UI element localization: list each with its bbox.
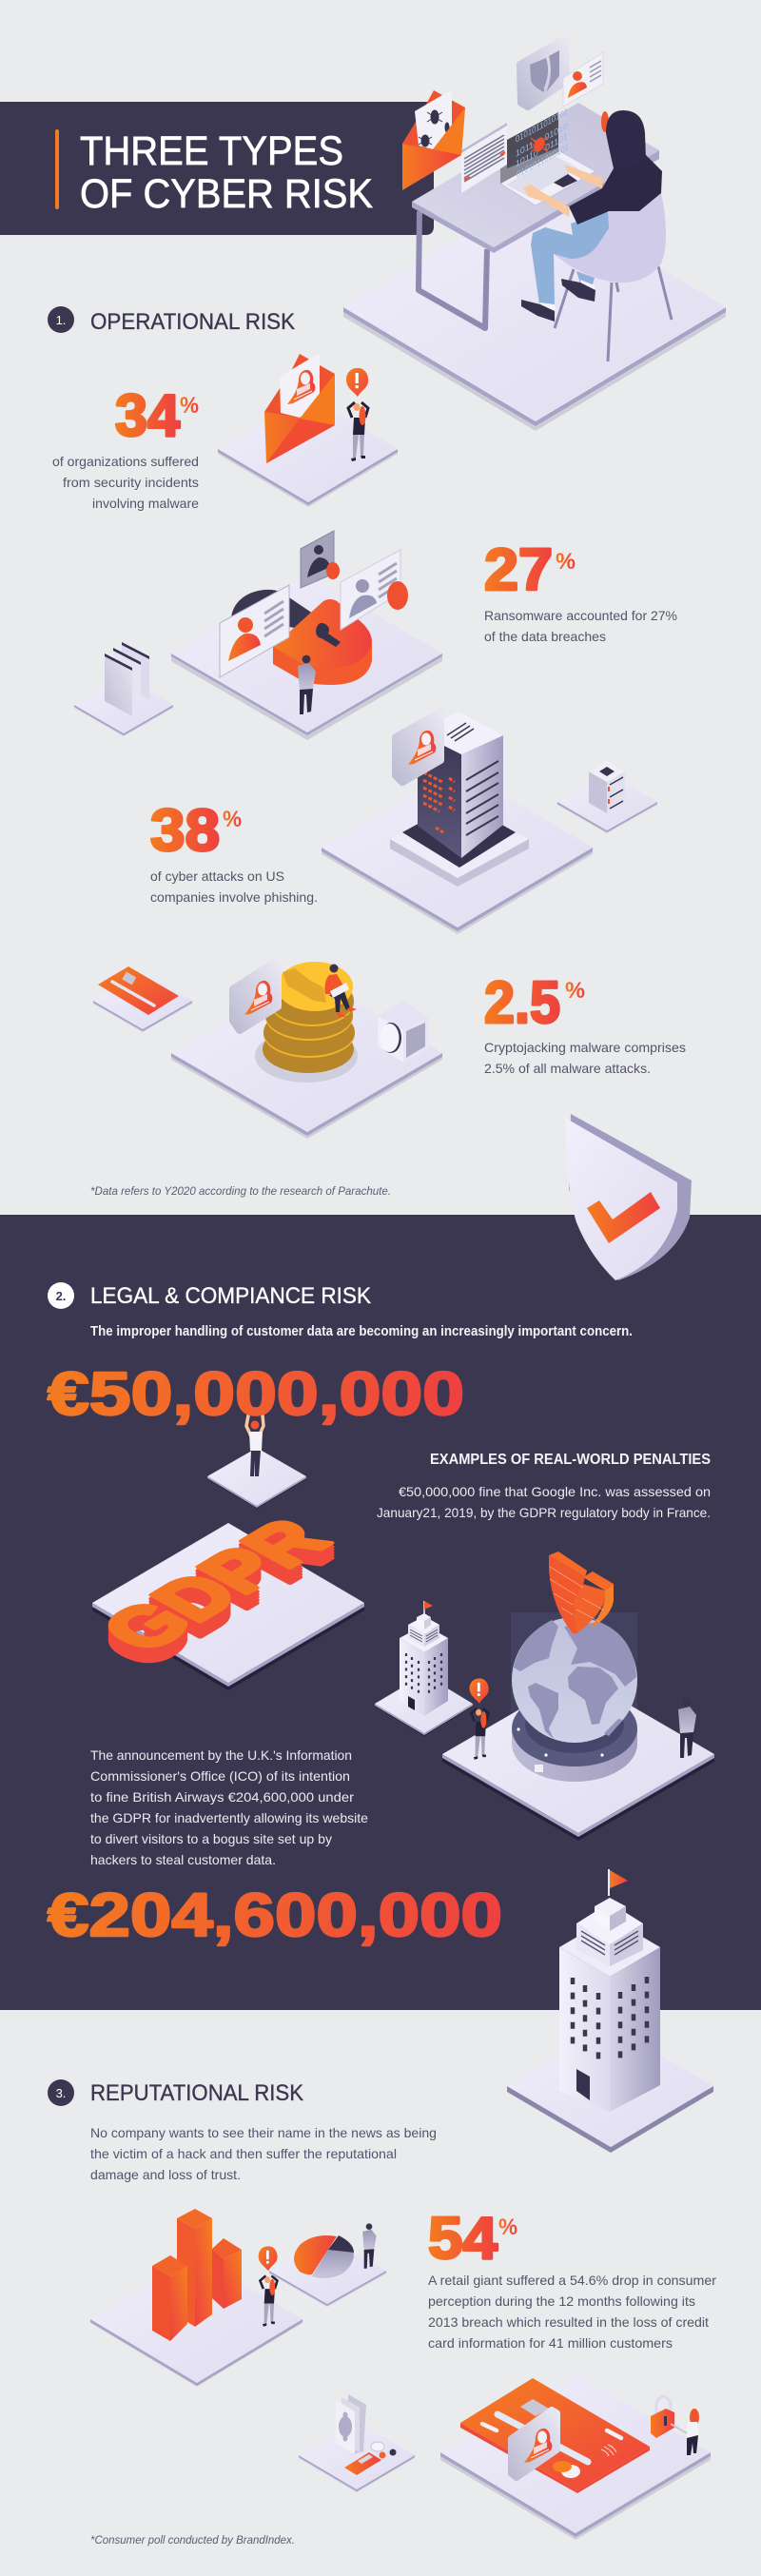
binary code: 10111 01010 xyxy=(516,121,568,160)
bug badge small xyxy=(326,562,340,579)
stat: 34% xyxy=(52,383,199,511)
footnote 2: *Consumer poll conducted by BrandIndex. xyxy=(90,2533,295,2547)
section 2 dark background xyxy=(0,1215,761,2010)
platform xyxy=(343,193,726,431)
bug badge large xyxy=(387,581,408,610)
binary code: 0101011010101 xyxy=(517,142,569,181)
card edge xyxy=(460,2423,650,2493)
jeans xyxy=(531,211,609,304)
platform xyxy=(507,2025,713,2153)
tower xyxy=(400,1638,424,1716)
section 2 heading xyxy=(48,1282,371,1309)
illustration: GDPR xyxy=(83,1508,364,1690)
woman with key xyxy=(671,2409,699,2455)
section 2 paragraph: Commissioner's Office (ICO) of its intention xyxy=(90,1768,350,1784)
card xyxy=(98,966,179,1015)
number badge xyxy=(48,2079,74,2106)
globe xyxy=(512,1617,637,1743)
body: €50,000,000 fine that Google Inc. was assessed on xyxy=(399,1484,711,1499)
illustration: person holding figure xyxy=(48,1359,464,1509)
section 2 paragraph: hackers to steal customer data. xyxy=(90,1852,276,1867)
extruded letters: GDPR xyxy=(83,1514,348,1669)
heading text: LEGAL & COMPIANCE RISK xyxy=(90,1283,371,1309)
accent bar xyxy=(55,129,59,209)
upper tier xyxy=(576,1923,610,1966)
banknotes xyxy=(348,2394,366,2454)
amount: €50,000,000 xyxy=(48,1359,464,1428)
keyhole xyxy=(316,623,341,647)
right bar xyxy=(212,2249,224,2309)
caption: 2.5% of all malware attacks. xyxy=(484,1061,651,1076)
coins xyxy=(263,962,355,1073)
bugs xyxy=(419,110,449,146)
stat: 54% xyxy=(428,2206,716,2351)
platform xyxy=(299,2422,415,2492)
binder 3 xyxy=(122,642,149,699)
caption: companies involve phishing. xyxy=(150,889,318,905)
section 2 intro: The improper handling of customer data are becoming an increasingly important concern. xyxy=(90,1324,633,1339)
section 2 paragraph xyxy=(90,1747,368,1867)
sock xyxy=(539,302,556,311)
stat: 27% xyxy=(484,537,677,644)
desk legs xyxy=(419,211,487,328)
hacker tile xyxy=(396,712,440,782)
server stack xyxy=(589,771,607,813)
percent: % xyxy=(223,807,242,832)
title band xyxy=(0,102,434,235)
card stripe xyxy=(498,2414,588,2462)
platform xyxy=(322,768,593,934)
checkmark xyxy=(587,1192,660,1243)
caption: involving malware xyxy=(92,496,199,511)
amount: 204,600,000: €204,600,000 xyxy=(48,1881,502,1949)
firewall xyxy=(549,1551,614,1633)
figure: 27 xyxy=(484,537,553,603)
headphone xyxy=(601,111,609,132)
globe base xyxy=(512,1706,637,1782)
chip xyxy=(520,2399,549,2416)
front shoe xyxy=(521,300,555,322)
illustration: money and mini card xyxy=(299,2394,415,2492)
padlock xyxy=(651,2396,674,2438)
illustration: large office tower xyxy=(507,1869,713,2153)
mini card xyxy=(344,2452,381,2475)
shackle xyxy=(231,590,316,628)
chair xyxy=(555,193,666,283)
binary code xyxy=(516,107,569,181)
tower right face xyxy=(610,1947,660,2112)
number badge: 1. xyxy=(56,313,66,327)
hacker tile xyxy=(233,963,278,1030)
platform xyxy=(90,2255,302,2387)
vents xyxy=(581,1931,638,1955)
flag xyxy=(423,1601,425,1614)
title: OF CYBER RISK xyxy=(80,171,373,217)
platform xyxy=(171,974,442,1139)
binary code: 0101011010101 xyxy=(516,107,568,146)
caption xyxy=(428,2273,716,2351)
letter tops: GDPR xyxy=(83,1508,348,1663)
binder 1 xyxy=(105,654,132,716)
man xyxy=(298,655,316,714)
laptop screen xyxy=(500,112,558,184)
caption: of the data breaches xyxy=(484,629,606,644)
percent: % xyxy=(565,978,585,1004)
door xyxy=(576,2069,590,2100)
right profile card xyxy=(341,550,400,630)
card xyxy=(460,2378,650,2490)
windows left xyxy=(573,1978,598,2064)
glow xyxy=(511,1612,637,1712)
stat: 2.5% xyxy=(484,970,686,1076)
penalties text: January21, 2019, by the GDPR regulatory body in France. xyxy=(377,1505,711,1520)
illustration: phishing envelope xyxy=(218,353,398,507)
left profile card xyxy=(220,585,289,677)
section 3 intro: the victim of a hack and then suffer the reputational xyxy=(90,2146,397,2161)
profile card xyxy=(563,52,603,107)
door xyxy=(408,1696,415,1710)
illustration: large credit card xyxy=(440,2373,711,2540)
tall bar xyxy=(177,2218,195,2327)
illustration: credit card small xyxy=(93,966,192,1032)
platform xyxy=(171,575,442,740)
section 3 heading xyxy=(48,2079,303,2106)
chair legs xyxy=(555,266,672,361)
illustration: pie chart xyxy=(269,2223,386,2307)
number badge xyxy=(48,306,74,333)
section 1 heading xyxy=(48,306,295,335)
caption: from security incidents xyxy=(63,475,199,490)
dark base xyxy=(402,801,516,868)
card logo xyxy=(553,2461,580,2478)
caption xyxy=(484,1040,686,1076)
torso xyxy=(569,154,662,224)
platform xyxy=(442,1675,714,1841)
platform xyxy=(218,396,398,507)
subheading: EXAMPLES OF REAL-WORLD PENALTIES xyxy=(430,1452,711,1468)
document window xyxy=(461,123,507,193)
man xyxy=(362,2223,377,2269)
section 2 paragraph: to divert visitors to a bogus site set up by xyxy=(90,1831,332,1846)
section 2 paragraph: the GDPR for inadvertently allowing its website xyxy=(90,1810,368,1825)
number badge: 3. xyxy=(56,2086,66,2100)
illustration: small building xyxy=(375,1601,473,1736)
pie xyxy=(312,2250,354,2278)
illustration: binders xyxy=(74,642,173,736)
caption: 2013 breach which resulted in the loss of credit xyxy=(428,2314,709,2330)
hacker tile xyxy=(512,2410,556,2477)
tower dark face xyxy=(418,732,461,858)
laptop base xyxy=(500,150,595,205)
windows xyxy=(406,1653,441,1697)
platform xyxy=(207,1448,306,1509)
illustration: shield with checkmark xyxy=(565,1114,692,1280)
figure: 34 xyxy=(115,383,181,449)
windows right xyxy=(620,1977,647,2063)
person with alert xyxy=(470,1678,489,1760)
percent: % xyxy=(180,393,199,419)
code lines xyxy=(423,772,455,832)
caption xyxy=(150,868,318,905)
envelope xyxy=(264,353,335,463)
base block xyxy=(390,839,529,887)
number badge: 2. xyxy=(56,1289,66,1303)
section 3 intro: No company wants to see their name in the news as being xyxy=(90,2125,437,2140)
person with alert xyxy=(259,2246,278,2327)
tower left face xyxy=(559,1947,610,2112)
caption: A retail giant suffered a 54.6% drop in consumer xyxy=(428,2273,716,2288)
binary code: 10110 01101 xyxy=(516,131,568,170)
header xyxy=(0,102,434,235)
illustration: globe and firewall xyxy=(442,1551,714,1841)
tower right face xyxy=(461,735,503,858)
title: THREE TYPES xyxy=(80,128,343,174)
platform xyxy=(92,1523,364,1690)
top cube xyxy=(595,1906,610,1931)
section 3 intro xyxy=(90,2125,437,2182)
platform xyxy=(375,1674,473,1736)
illustration: ransomware lock xyxy=(171,531,442,740)
percent: % xyxy=(556,549,576,575)
caption: perception during the 12 months following its xyxy=(428,2293,695,2309)
title xyxy=(80,128,373,217)
illustration: bar chart xyxy=(90,2209,302,2387)
extruded letters: GDPR xyxy=(83,1523,348,1678)
contactless mark xyxy=(601,2445,616,2456)
illustration: coin stack xyxy=(171,962,442,1139)
heading text: REPUTATIONAL RISK xyxy=(90,2080,303,2106)
caption: of organizations suffered xyxy=(52,454,199,469)
footnote 1: *Data refers to Y2020 according to the research of Parachute. xyxy=(90,1184,391,1198)
extruded letters: GDPR xyxy=(83,1517,348,1672)
percent: % xyxy=(498,2215,517,2240)
number badge xyxy=(48,1282,74,1309)
hair xyxy=(606,110,646,168)
extruded letters: GDPR xyxy=(83,1512,348,1667)
figure: 54 xyxy=(428,2206,498,2272)
lock body xyxy=(273,599,372,685)
penalties text xyxy=(377,1452,711,1520)
binder 2 xyxy=(113,648,141,706)
platform xyxy=(269,2237,386,2307)
extruded letters: GDPR xyxy=(83,1520,348,1675)
caption xyxy=(52,454,199,511)
dark profile card xyxy=(301,531,334,588)
shadow xyxy=(255,1029,358,1083)
section 2 paragraph: The announcement by the U.K.'s Information xyxy=(90,1747,352,1763)
caption xyxy=(484,608,677,644)
seated man xyxy=(325,965,357,1017)
heading text: OPERATIONAL RISK xyxy=(90,309,295,335)
back leg and shoe xyxy=(576,271,595,287)
flag xyxy=(608,1869,610,1896)
person with alert xyxy=(346,368,368,461)
platform xyxy=(557,773,657,833)
illustration: server tower xyxy=(322,712,593,934)
platform xyxy=(440,2373,711,2540)
safe xyxy=(378,1001,429,1063)
caption: Ransomware accounted for 27% xyxy=(484,608,677,623)
stat: 38% xyxy=(150,798,318,905)
figure: 38 xyxy=(150,798,220,864)
caption: Cryptojacking malware comprises xyxy=(484,1040,686,1055)
vents xyxy=(466,761,498,835)
shield tile xyxy=(520,39,566,107)
tower top xyxy=(418,712,503,754)
caption: card information for 41 million customers xyxy=(428,2335,673,2351)
left bar xyxy=(152,2266,170,2341)
caption: of cyber attacks on US xyxy=(150,868,284,884)
desk top xyxy=(412,150,659,253)
man arms up xyxy=(246,1415,263,1476)
envelope xyxy=(402,89,465,190)
tokens xyxy=(371,2442,384,2451)
arms xyxy=(523,165,602,217)
illustration: woman at desk xyxy=(343,39,726,431)
bug on screen xyxy=(529,136,550,153)
illustration: small server xyxy=(557,761,657,833)
platform xyxy=(93,972,192,1032)
section 2 paragraph: to fine British Airways €204,600,000 under xyxy=(90,1789,354,1805)
figure: 2.5 xyxy=(484,970,560,1036)
continents xyxy=(514,1620,636,1739)
platform xyxy=(74,676,173,736)
section 3 intro: damage and loss of trust. xyxy=(90,2167,241,2182)
man xyxy=(678,1699,696,1758)
tower roof xyxy=(559,1918,660,1977)
